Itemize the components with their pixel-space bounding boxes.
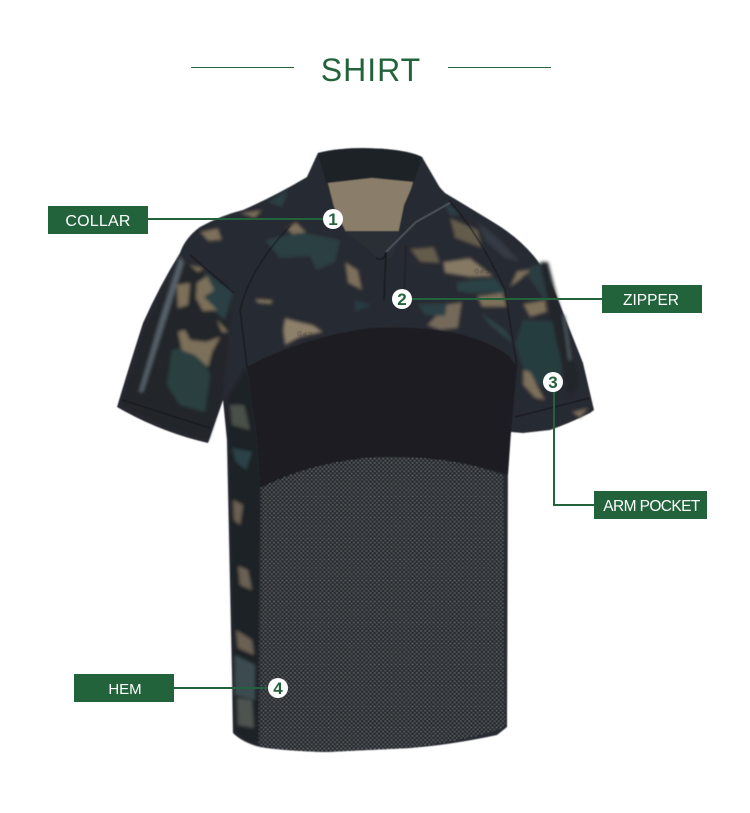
- shirt base silhouette: [117, 148, 594, 752]
- callout 2: zipper: 2: [397, 290, 407, 309]
- title: SHIRT: [321, 52, 421, 88]
- placket and zipper: [376, 203, 450, 300]
- callout 3: arm pocket: 3: [548, 373, 558, 392]
- small printed marks: CPD: [473, 267, 489, 273]
- callout 4: hem: [74, 674, 288, 702]
- callout 1: collar: COLLAR: [65, 213, 131, 230]
- raglan seams: [122, 198, 590, 428]
- callout 2: zipper: ZIPPER: [623, 292, 679, 309]
- neck opening: [343, 232, 403, 258]
- small printed marks: [296, 267, 489, 336]
- callout 1: collar: 1: [328, 210, 338, 229]
- callout 4: hem: 4: [273, 679, 283, 698]
- callout 4: hem: HEM: [108, 681, 142, 698]
- right sleeve camouflage: [510, 262, 588, 418]
- shirt illustration: [117, 148, 594, 752]
- right collar flap: [398, 157, 450, 245]
- left collar flap: [300, 153, 378, 258]
- callout 2: zipper: [392, 285, 702, 313]
- side camouflage stripe: [227, 367, 260, 745]
- small printed marks: CPD: [296, 329, 312, 336]
- chest panel: [247, 327, 517, 488]
- yoke camouflage: [255, 218, 515, 345]
- inner collar label: [328, 178, 413, 231]
- collar band: [318, 148, 422, 183]
- left sleeve camouflage: [122, 256, 233, 440]
- callout 3: arm pocket: ARM POCKET: [603, 498, 701, 515]
- callout 3: arm pocket: [543, 372, 707, 519]
- shoulder camouflage: [200, 190, 520, 262]
- mesh panel: [258, 457, 505, 752]
- callout 1: collar: [48, 206, 343, 234]
